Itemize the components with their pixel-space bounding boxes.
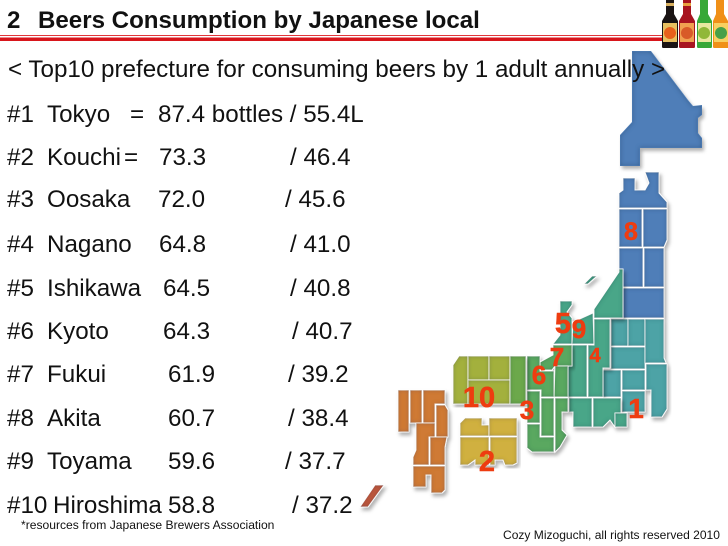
- rank 6: 64.3: [163, 318, 210, 345]
- title underline: [0, 35, 662, 41]
- map rank numbers: 10: [463, 382, 495, 414]
- icon: beer bottles: [662, 0, 728, 48]
- title: Beers Consumption by Japanese local: [38, 7, 480, 34]
- map: Kanto: [603, 319, 667, 417]
- map rank numbers: 7: [550, 342, 564, 372]
- map: Shikoku: [460, 418, 517, 465]
- rank 4: / 41.0: [290, 231, 351, 258]
- map rank numbers: 5: [555, 308, 571, 340]
- rank 5: #5: [7, 275, 34, 302]
- rank 8: Akita: [47, 405, 101, 432]
- footnote: source: *resources from Japanese Brewers Association: [21, 518, 274, 532]
- map of Japan: [360, 51, 702, 507]
- rank 5: Ishikawa: [47, 275, 142, 302]
- rank 8: / 38.4: [288, 405, 349, 432]
- rank 3: [7, 186, 346, 213]
- rank 3: #3: [7, 186, 34, 213]
- rank 7: Fukui: [47, 361, 106, 388]
- rank 10: #10: [7, 492, 47, 519]
- rank 2: 73.3: [159, 144, 206, 171]
- rank 3: Oosaka: [47, 186, 131, 213]
- rank 8: 60.7: [168, 405, 215, 432]
- rank 6: / 40.7: [292, 318, 353, 345]
- map rank numbers: 8: [624, 218, 638, 246]
- rank 1: =: [130, 101, 144, 128]
- rank 4: #4: [7, 231, 34, 258]
- rank 5: [7, 275, 351, 302]
- rank 6: #6: [7, 318, 34, 345]
- rank 3: 72.0: [158, 186, 205, 213]
- rank 4: [7, 231, 351, 258]
- subtitle: < Top10 prefecture for consuming beers by 1 adult annually >: [8, 56, 665, 83]
- rank 5: 64.5: [163, 275, 210, 302]
- copyright: Cozy Mizoguchi, all rights reserved 2010: [503, 528, 720, 542]
- rank 9: #9: [7, 448, 34, 475]
- title: 2: [7, 7, 20, 34]
- map rank numbers: 4: [589, 345, 601, 367]
- map: Kyushu: [360, 390, 448, 507]
- map rank numbers: 9: [572, 314, 586, 344]
- rank 1: Tokyo: [47, 101, 110, 128]
- map rank numbers: [463, 218, 644, 478]
- rank 8: #8: [7, 405, 34, 432]
- rank 2: Kouchi: [47, 144, 121, 171]
- rank 7: / 39.2: [288, 361, 349, 388]
- rank 5: / 40.8: [290, 275, 351, 302]
- rank 7: 61.9: [168, 361, 215, 388]
- rank 10: 58.8: [168, 492, 215, 519]
- ranking list: [7, 101, 364, 519]
- rank 10: [7, 492, 353, 519]
- rank 1: 87.4 bottles / 55.4L: [158, 101, 364, 128]
- rank 9: [7, 448, 346, 475]
- map: Chubu: [553, 269, 627, 427]
- rank 7: [7, 361, 349, 388]
- map rank numbers: 3: [520, 395, 534, 425]
- map rank numbers: 1: [628, 393, 644, 424]
- rank 1: [7, 101, 364, 128]
- rank 4: 64.8: [159, 231, 206, 258]
- rank 9: / 37.7: [285, 448, 346, 475]
- rank 7: #7: [7, 361, 34, 388]
- rank 2: / 46.4: [290, 144, 351, 171]
- rank 2: [7, 144, 351, 171]
- map: Kinki: [527, 345, 572, 452]
- rank 1: #1: [7, 101, 34, 128]
- rank 6: [7, 318, 353, 345]
- map: Chugoku: [453, 356, 526, 404]
- map rank numbers: 6: [532, 360, 546, 390]
- map: Hokkaido and Tohoku: [619, 51, 702, 318]
- rank 2: #2: [7, 144, 34, 171]
- rank 4: Nagano: [47, 231, 132, 258]
- rank 9: Toyama: [47, 448, 132, 475]
- rank 10: / 37.2: [292, 492, 353, 519]
- rank 6: Kyoto: [47, 318, 109, 345]
- rank 9: 59.6: [168, 448, 215, 475]
- map rank numbers: 2: [479, 446, 495, 478]
- rank 2: =: [124, 144, 138, 171]
- rank 3: / 45.6: [285, 186, 346, 213]
- rank 10: Hiroshima: [53, 492, 162, 519]
- rank 8: [7, 405, 349, 432]
